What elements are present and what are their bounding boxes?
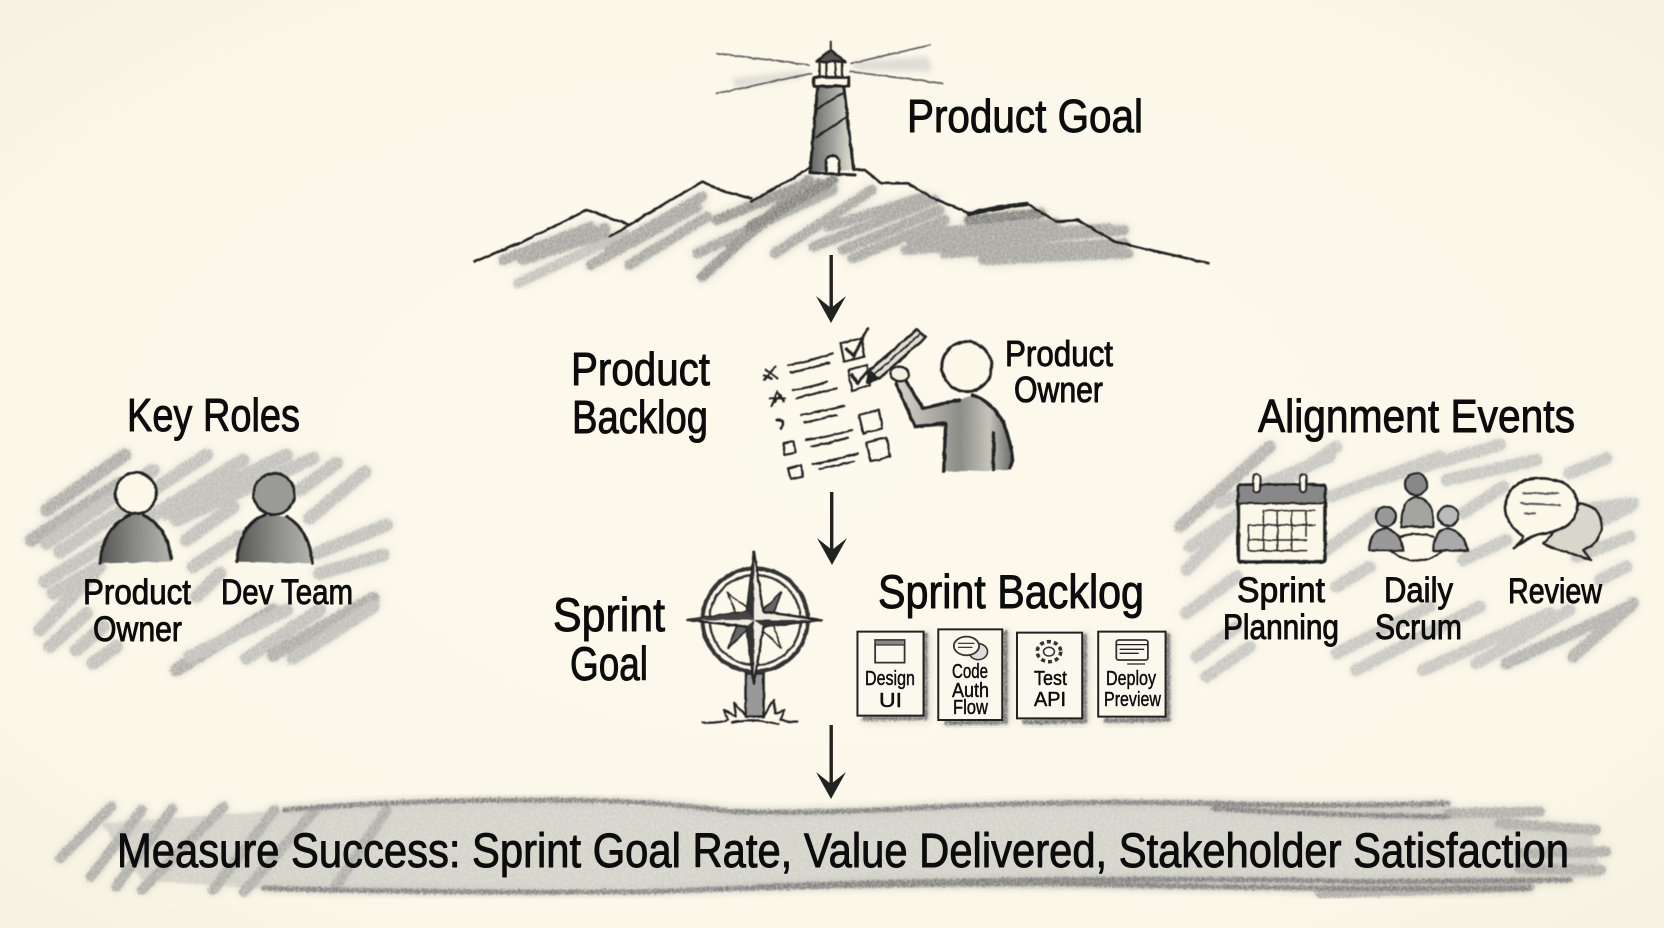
heading: sprint goal: Sprint	[553, 588, 665, 641]
card: code auth flow: Auth	[952, 680, 989, 702]
shading: banner pencil band	[60, 800, 1606, 893]
card: deploy preview: Preview	[1104, 689, 1161, 711]
card shadows	[863, 631, 1168, 723]
heading: sprint goal: Goal	[570, 637, 648, 690]
illustration: mountain ridgeline	[475, 168, 1209, 263]
label: sprint planning: Sprint	[1237, 571, 1325, 610]
label: product owner: Owner	[93, 610, 182, 649]
label: dev team: Dev Team	[221, 573, 353, 612]
panel: sprint goal	[553, 552, 821, 724]
illustration: lighthouse light beams	[731, 57, 933, 88]
card: code auth flow: Code	[952, 661, 988, 683]
shading: alignment events scribble	[1180, 445, 1633, 677]
heading: key roles: Key Roles	[127, 389, 300, 441]
heading: product backlog: Product	[571, 343, 710, 395]
heading: sprint goal	[553, 588, 665, 690]
label: product owner: Owner	[1014, 369, 1103, 410]
icon: product owner writing with pencil	[867, 329, 1013, 472]
icon: product owner person	[100, 473, 172, 563]
icon: lighthouse	[717, 42, 942, 175]
illustration: mountain shading	[504, 180, 1129, 283]
label: daily scrum: Daily	[1384, 571, 1453, 610]
panel: key roles	[32, 389, 387, 670]
label: review: Review	[1508, 572, 1603, 611]
panel: measure success banner	[60, 800, 1606, 893]
card: deploy preview	[1098, 632, 1166, 717]
icon: dev team person	[237, 473, 312, 563]
icon: review speech bubbles	[1505, 478, 1602, 560]
label: daily scrum	[1375, 571, 1462, 647]
heading: product goal: Product Goal	[907, 90, 1143, 142]
icon: backlog checklist	[764, 328, 890, 479]
arrow: product backlog to sprint goal	[817, 492, 847, 565]
panel: alignment events	[1180, 390, 1633, 677]
label: product owner	[83, 573, 191, 649]
panel: product goal lighthouse on mountains	[475, 42, 1209, 283]
label: daily scrum: Scrum	[1375, 608, 1462, 647]
card: test api: Test	[1034, 668, 1067, 690]
card: test api: API	[1034, 689, 1066, 711]
card: design ui: UI	[879, 690, 902, 712]
card: code auth flow: Flow	[953, 697, 988, 719]
icon: daily scrum team	[1369, 473, 1468, 561]
arrow: sprint goal to measure success	[816, 725, 846, 799]
arrow: product goal to product backlog	[816, 255, 846, 323]
label: product owner: Product	[83, 573, 191, 612]
card: design ui: Design	[865, 668, 915, 690]
icon: sprint planning calendar	[1238, 474, 1325, 562]
heading: alignment events: Alignment Events	[1258, 390, 1575, 442]
icon: compass star on post	[688, 552, 821, 724]
label: product owner: Product	[1005, 333, 1113, 374]
label: sprint planning	[1223, 571, 1339, 647]
card: deploy preview: Deploy	[1106, 668, 1156, 690]
card: design ui	[857, 632, 924, 716]
heading: product backlog	[571, 343, 710, 443]
shading: key roles scribble	[32, 455, 387, 670]
panel: product backlog	[571, 328, 1113, 479]
card: test api	[1017, 633, 1082, 718]
label: sprint planning: Planning	[1223, 608, 1339, 647]
label: product owner	[1005, 333, 1113, 410]
heading: sprint backlog: Sprint Backlog	[878, 565, 1144, 618]
card: code auth flow	[938, 629, 1002, 720]
panel: sprint backlog	[857, 565, 1168, 723]
heading: product backlog: Backlog	[572, 391, 708, 443]
